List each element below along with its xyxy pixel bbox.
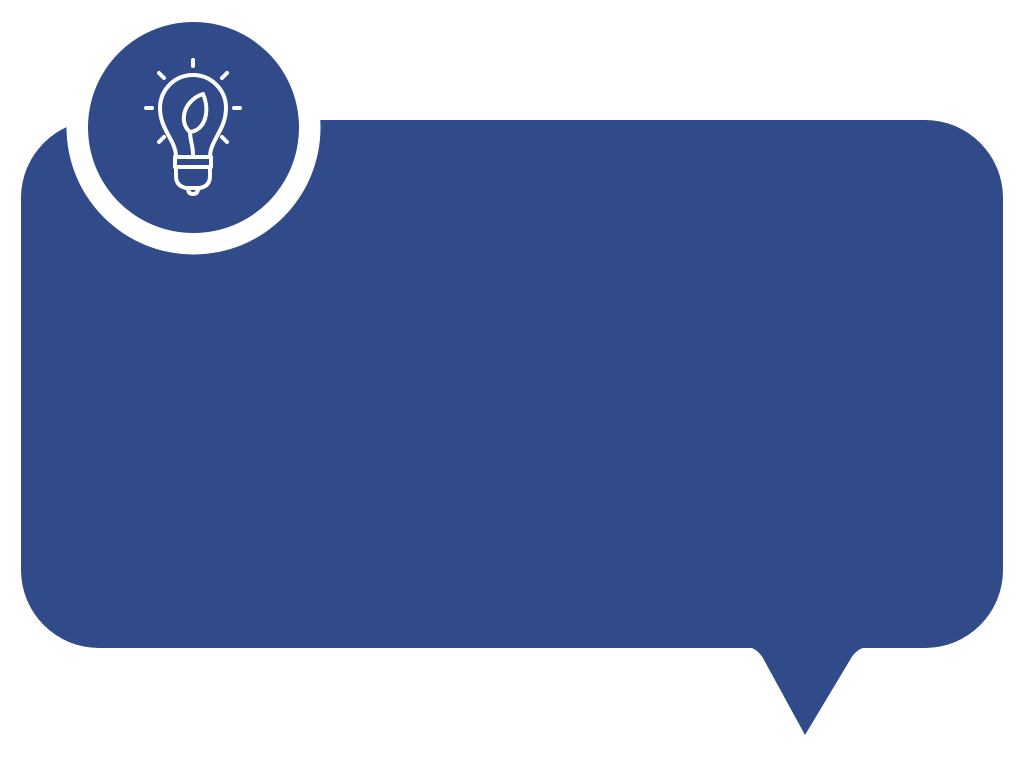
icon badge: circle with bulb [66, 0, 320, 254]
panel: speech bubble [21, 120, 1003, 735]
icon: lightbulb with leaf [146, 60, 240, 194]
